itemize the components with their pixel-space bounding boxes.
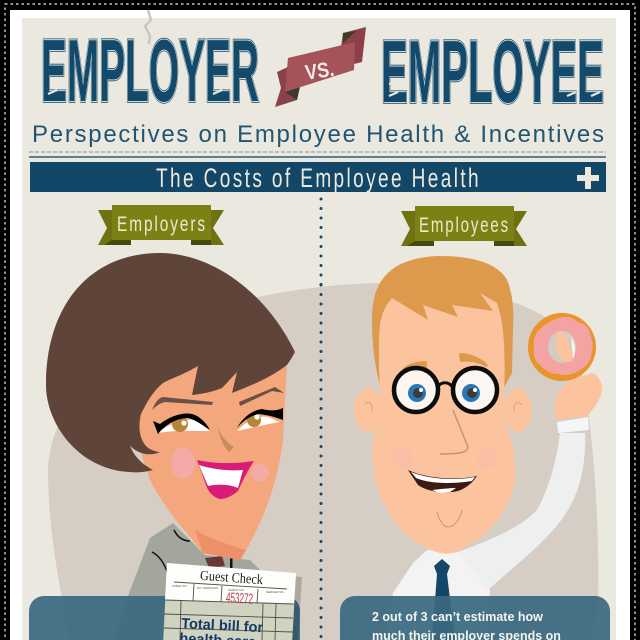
shirt xyxy=(385,550,490,640)
cuff xyxy=(557,417,589,433)
title: employer xyxy=(41,21,259,120)
check small labels: SERVER NO. xyxy=(266,590,285,594)
check small labels: TABLE NO. xyxy=(172,584,188,588)
eyebrows xyxy=(152,387,284,410)
eyebrows xyxy=(402,353,488,369)
center dotted divider xyxy=(320,199,322,640)
ribbon: employers xyxy=(98,205,224,245)
character: employee man xyxy=(354,256,602,640)
tie xyxy=(432,559,455,640)
suit xyxy=(115,523,300,640)
glasses xyxy=(394,368,497,412)
infographic: EMPLOYER xyxy=(41,21,259,120)
icon: donut xyxy=(528,313,596,381)
label: Employers xyxy=(117,213,207,236)
eyes xyxy=(158,420,210,433)
tie xyxy=(205,556,225,568)
face xyxy=(130,350,287,560)
vs ribbon xyxy=(275,27,366,107)
section bar xyxy=(30,162,606,193)
arm xyxy=(458,433,585,590)
face xyxy=(372,293,515,554)
check small labels: CHECK NO. xyxy=(228,588,245,592)
panel: employees xyxy=(340,596,610,640)
subtitle: Perspectives on Employee Health & Incentives xyxy=(32,121,604,148)
hair back xyxy=(372,256,513,395)
chin xyxy=(437,510,462,527)
guest check xyxy=(163,563,302,640)
ribbon: employees xyxy=(401,206,527,246)
nose xyxy=(440,410,468,454)
panel: employers xyxy=(29,596,300,640)
mouth xyxy=(408,470,477,492)
section heading: The Costs of Employee Health xyxy=(156,163,481,193)
check heading: Guest Check xyxy=(200,569,263,588)
cheeks xyxy=(392,447,414,469)
ears xyxy=(354,388,382,432)
label: Employees xyxy=(419,214,510,237)
character: employer woman xyxy=(46,253,300,640)
vs label: VS. xyxy=(304,58,336,85)
nose xyxy=(218,425,234,452)
background blob xyxy=(48,283,598,640)
hair xyxy=(46,253,295,472)
infographic: EMPLOYER xyxy=(41,21,259,120)
check number: 453272 xyxy=(226,590,253,608)
icon: plus xyxy=(577,167,599,189)
hand xyxy=(554,373,602,420)
check small labels: NO. PERSONS xyxy=(197,586,218,590)
panel text: 2 out of 3 can’t estimate how xyxy=(372,610,543,624)
infographic: EMPLOYER xyxy=(41,21,259,120)
cheeks xyxy=(171,447,195,479)
check total: Total bill for xyxy=(181,616,264,636)
mouth xyxy=(197,460,254,499)
check small labels xyxy=(172,584,285,594)
